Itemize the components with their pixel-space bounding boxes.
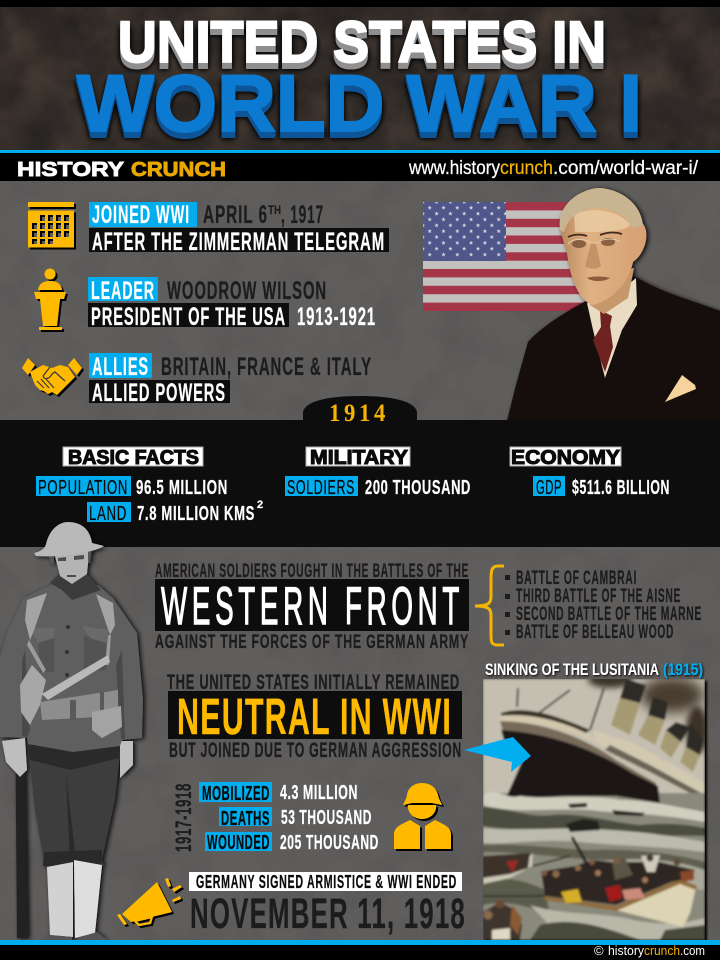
fact: joined WWI — [89, 201, 389, 256]
bracket — [475, 566, 504, 645]
casualty stats: DEATHS — [221, 808, 270, 830]
casualty stats: MOBILIZED — [202, 783, 270, 805]
fact: leader: WOODROW WILSON — [167, 277, 327, 305]
website url: crunch — [500, 158, 553, 179]
portrait: Woodrow Wilson — [507, 188, 720, 421]
footer — [0, 940, 720, 960]
fact: leader: 1913-1921 — [297, 303, 376, 331]
flag: USA — [423, 202, 588, 311]
image caption: Lusitania: SINKING OF THE LUSITANIA — [485, 660, 659, 679]
icon: podium — [34, 268, 66, 330]
column: basic facts: POPULATION — [38, 477, 128, 499]
photo: US soldier — [0, 522, 143, 940]
title — [77, 10, 642, 149]
column: basic facts — [36, 447, 263, 525]
brand logo: HISTORY — [17, 159, 125, 181]
header bar — [0, 150, 720, 181]
icon: soldier — [394, 783, 451, 849]
copyright: crunch — [644, 943, 680, 958]
text block: western front — [155, 561, 469, 653]
website url: www.history — [408, 158, 500, 179]
year tab: 1914 — [329, 400, 389, 427]
text block: western front: AMERICAN SOLDIERS FOUGHT IN THE BATTLES OF THE — [155, 561, 469, 582]
casualty stats: 205 THOUSAND — [280, 832, 379, 854]
casualty stats: 53 THOUSAND — [281, 807, 372, 829]
column: basic facts: LAND — [89, 503, 127, 525]
brand logo — [17, 159, 226, 181]
column: military — [285, 447, 471, 499]
fact: allies: ALLIED POWERS — [92, 379, 226, 407]
column: basic facts: 7.8 MILLION KMS — [137, 503, 255, 525]
image caption: Lusitania: (1915) — [663, 660, 703, 679]
copyright: .com — [680, 943, 705, 958]
column: basic facts: 2 — [257, 499, 263, 511]
icon: calendar — [28, 202, 74, 248]
year tab — [303, 396, 417, 427]
text block: neutral in WWI — [167, 671, 462, 762]
armistice banner: GERMANY SIGNED ARMISTICE & WWI ENDED — [196, 872, 457, 892]
vertical years label: 1917-1918 — [171, 783, 196, 852]
copyright — [594, 943, 705, 958]
fact: leader — [88, 277, 376, 331]
fact: allies: BRITAIN, FRANCE & ITALY — [161, 353, 372, 381]
fact: joined WWI: , 1917 — [281, 201, 324, 229]
text block: neutral in WWI: BUT JOINED DUE TO GERMAN AGGRESSION — [169, 739, 462, 762]
fact: joined WWI: APRIL 6 — [203, 201, 268, 229]
column: basic facts: BASIC FACTS — [68, 447, 199, 469]
column: economy: GDP — [536, 477, 562, 499]
website url: .com/world-war-i/ — [553, 158, 699, 179]
column: basic facts: 96.5 MILLION — [136, 477, 228, 499]
casualty stats: WOUNDED — [207, 832, 270, 854]
copyright: © — [594, 943, 604, 958]
painting: sinking of the Lusitania — [483, 672, 708, 942]
copyright: history — [608, 943, 644, 958]
armistice date: NOVEMBER 11, 1918 — [190, 890, 466, 938]
fact: joined WWI: AFTER THE ZIMMERMAN TELEGRAM — [92, 228, 385, 256]
fact: leader: PRESIDENT OF THE USA — [91, 303, 286, 331]
text block: western front: AGAINST THE FORCES OF THE GERMAN ARMY — [155, 632, 469, 653]
casualty stats — [199, 782, 379, 854]
title line 2: WORLD WAR I — [77, 59, 642, 149]
column: economy: ECONOMY — [511, 447, 621, 469]
brand logo: CRUNCH — [131, 159, 226, 181]
panel: 1914 stats — [0, 396, 720, 547]
text block: neutral in WWI: THE UNITED STATES INITIALLY REMAINED — [167, 671, 460, 694]
armistice banner — [189, 872, 462, 892]
website url — [408, 158, 699, 179]
column: military: 200 THOUSAND — [365, 477, 471, 499]
title line 1: UNITED STATES IN — [118, 10, 606, 75]
column: military: SOLDIERS — [287, 477, 355, 499]
icon: handshake — [22, 358, 82, 395]
fact: allies — [89, 353, 372, 407]
column: military: MILITARY — [310, 447, 409, 469]
column: economy — [510, 447, 670, 499]
list: battles — [505, 568, 702, 643]
arrow — [464, 737, 531, 772]
casualty stats: 4.3 MILLION — [280, 782, 358, 804]
icon: megaphone — [117, 878, 182, 925]
fact: joined WWI: TH — [268, 203, 281, 217]
fact: allies: ALLIES — [92, 353, 149, 381]
fact: leader: LEADER — [91, 277, 155, 305]
fact: joined WWI: JOINED WWI — [92, 201, 190, 229]
text block: neutral in WWI: NEUTRAL IN WWI — [177, 688, 452, 745]
